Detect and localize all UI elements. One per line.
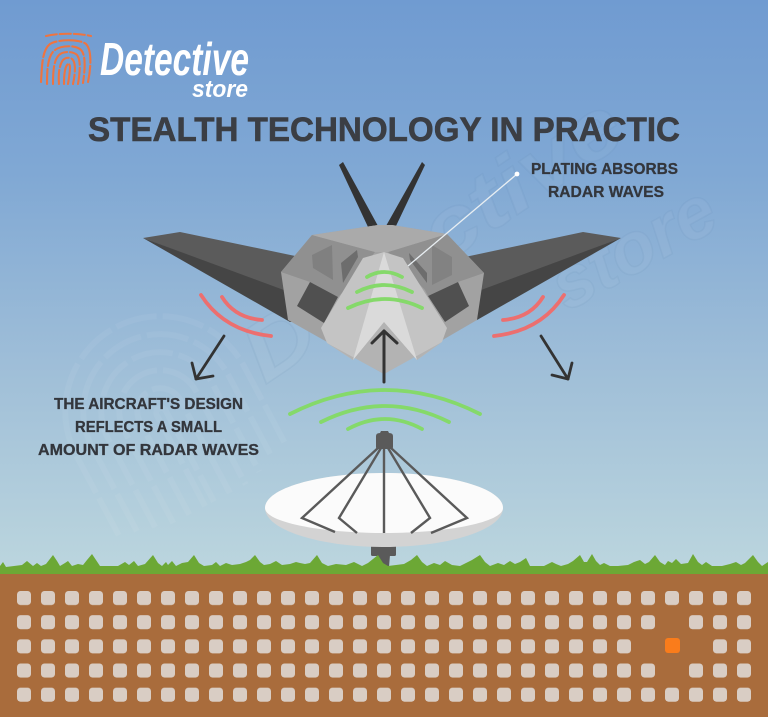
text: plating absorbs radar waves: RADAR WAVES (548, 184, 664, 201)
right wing (465, 232, 621, 322)
absorbed radar waves on aircraft (348, 272, 422, 308)
upper right window (432, 245, 452, 285)
dish struts (302, 448, 467, 533)
inner right window (409, 253, 427, 283)
dish underside (265, 473, 503, 547)
text: aircraft design: THE AIRCRAFT'S DESIGN (54, 396, 243, 413)
gap cells around target (640, 614, 704, 678)
text: aircraft design: REFLECTS A SMALL (75, 419, 222, 436)
dish base (371, 545, 396, 567)
nose lower (327, 322, 442, 374)
reflected radar waves: left (201, 295, 271, 336)
watermark: fingerprint (32, 283, 293, 548)
text: plating absorbs radar waves: PLATING ABSORBS (531, 161, 678, 178)
arrow: reflected right (541, 336, 572, 379)
dish face (265, 473, 503, 533)
aircraft (143, 162, 621, 374)
arrow: up to aircraft (372, 331, 397, 382)
brand name: Detective (100, 33, 249, 85)
fuselage (281, 225, 484, 374)
radar emitter (376, 431, 393, 449)
upper left window (312, 245, 333, 280)
right canopy shade (388, 234, 484, 296)
text: aircraft design: AMOUNT OF RADAR WAVES (38, 442, 259, 459)
watermark: brand text: Detective (224, 78, 640, 400)
outgoing radar waves (290, 390, 480, 429)
text: aircraft design (38, 396, 259, 459)
inner left window (341, 250, 358, 283)
right dark intake (428, 282, 469, 322)
center white streak (353, 252, 417, 360)
watermark: brand text: store (536, 170, 730, 326)
title: STEALTH TECHNOLOGY IN PRACTIC (88, 111, 680, 149)
top canopy panel (312, 225, 447, 252)
reflected radar waves: right (494, 295, 564, 336)
text: plating absorbs radar waves (531, 161, 678, 201)
brand subname: store (192, 76, 248, 103)
orange target cell (665, 638, 680, 653)
nose light panel (321, 252, 447, 360)
logo (41, 33, 249, 103)
icon: orange fingerprint (41, 34, 91, 84)
radar dish (265, 431, 503, 567)
watermark: brand text (224, 78, 730, 400)
arrow: reflected left (192, 336, 224, 379)
left dark intake (297, 282, 338, 323)
grass (0, 554, 768, 575)
soil ground (0, 574, 768, 717)
left canopy shade (281, 235, 375, 297)
tail fins (339, 162, 425, 227)
data cell grid (17, 591, 751, 702)
callout line: plating (408, 172, 519, 266)
left wing (143, 232, 300, 322)
